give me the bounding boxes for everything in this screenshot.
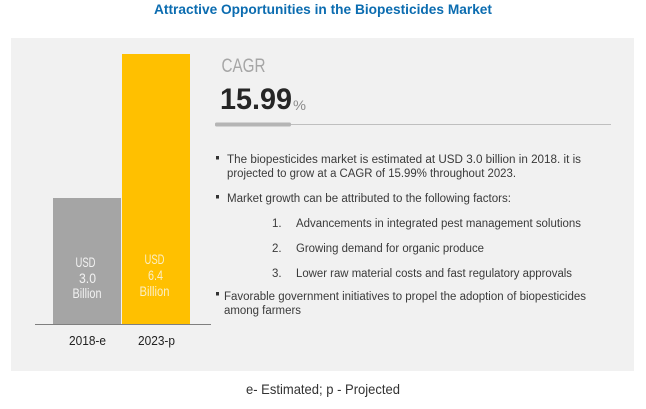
CAGR divider	[215, 122, 611, 126]
axis label: 2023-p: 2023-p	[138, 333, 175, 348]
bar chart	[35, 54, 211, 348]
bar label: 2018 value: Billion	[72, 286, 102, 301]
text block: growth factors: Growing demand for organic produce	[296, 243, 484, 255]
axis label: 2018-e: 2018-e	[69, 333, 106, 348]
text block: growth factors: Lower raw material costs and fast regulatory approvals	[296, 268, 572, 280]
text block: market summary: projected to grow at a CAGR of 15.99% throughout 2023.	[227, 168, 516, 180]
bar label: 2023 value	[140, 252, 170, 299]
text block: growth factors: 2.	[272, 243, 282, 255]
text block: market summary	[216, 154, 581, 180]
bar: 2023 projected	[122, 54, 190, 324]
title: Attractive Opportunities in the Biopesticides Market	[154, 1, 492, 17]
footnote: e- Estimated; p - Projected	[246, 381, 400, 397]
text block: government initiatives: Favorable government initiatives to propel the adoption of biopesticides	[224, 291, 586, 303]
bar label: 2023 value: 6.4	[148, 268, 163, 283]
bar: 2018 estimated	[53, 198, 121, 324]
panel: background	[11, 38, 634, 371]
text block: growth factors: Market growth can be attributed to the following factors:	[227, 193, 511, 205]
bar label: 2023 value: USD	[144, 252, 165, 267]
text block: growth factors: 1.	[272, 218, 282, 230]
CAGR value: 15.99	[220, 83, 292, 116]
bar label: 2018 value	[72, 255, 102, 301]
text block: market summary: The biopesticides market is estimated at USD 3.0 billion in 2018. it is	[227, 154, 581, 166]
bar label: 2018 value: USD	[76, 255, 96, 270]
bar label: 2023 value: Billion	[140, 284, 170, 299]
text block: growth factors	[216, 193, 581, 280]
text block: growth factors: Advancements in integrated pest management solutions	[296, 218, 581, 230]
CAGR value: %	[293, 97, 306, 113]
text block: government initiatives: among farmers	[224, 305, 301, 317]
bar label: 2018 value: 3.0	[79, 271, 96, 286]
text block: growth factors: 3.	[272, 268, 282, 280]
text block: government initiatives	[216, 291, 586, 317]
CAGR label: CAGR	[222, 55, 266, 77]
